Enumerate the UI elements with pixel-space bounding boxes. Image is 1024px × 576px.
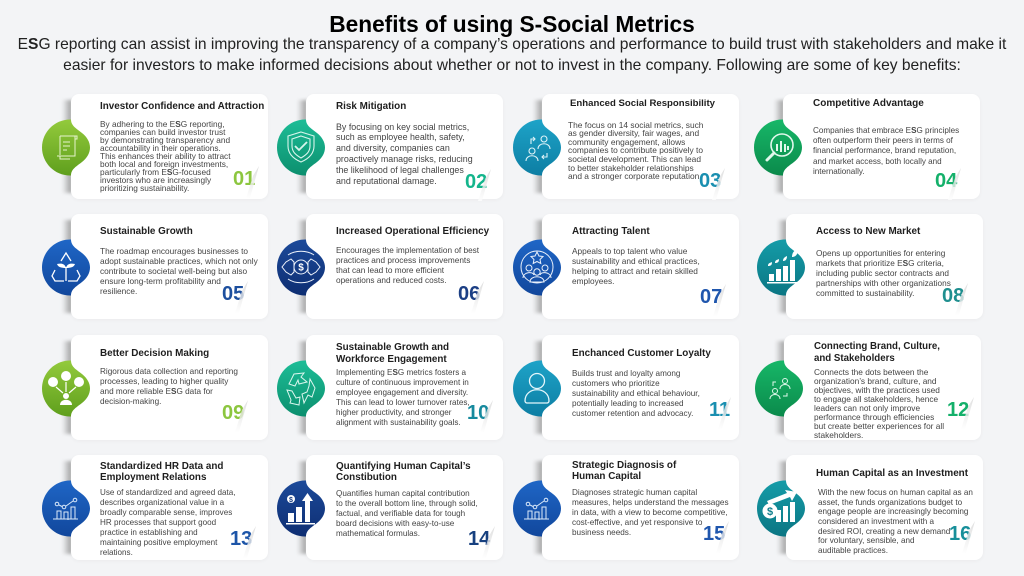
heading: Human Capital — [572, 471, 641, 482]
panel: card 09 — [42, 335, 268, 440]
body text — [572, 488, 729, 537]
icon: solid bars with arrow: $ — [289, 497, 293, 504]
heading: and Stakeholders — [814, 353, 895, 364]
body text: With the new focus on human capital as an — [818, 488, 973, 497]
body text: societal development. This can lead — [568, 154, 701, 164]
body text: as gender diversity, fair wages, and — [568, 128, 699, 138]
body text: markets that prioritize ESG criteria, — [816, 259, 944, 268]
heading: Human Capital as an Investment — [816, 468, 968, 478]
intro text: easier for investors to make informed decisions about whether or not to invest in the company. Following are some of key benefits: — [63, 57, 961, 74]
number: 14 — [468, 528, 490, 550]
body text: stakeholders. — [814, 430, 863, 440]
panel: card 02 — [277, 94, 503, 201]
body text: to engage all stakeholders, hence — [814, 394, 938, 404]
body text: but create better experiences for all — [814, 421, 944, 431]
number: 13 — [230, 528, 252, 550]
intro text — [18, 36, 1006, 74]
body text: and reputational damage. — [336, 176, 437, 186]
body text: committed to sustainability. — [816, 289, 914, 298]
panel: card 08 — [757, 214, 983, 319]
body text: business needs. — [572, 528, 631, 537]
heading: Investor Confidence and Attraction — [100, 101, 264, 112]
heading: Risk Mitigation — [336, 101, 406, 112]
body text: auditable practices. — [818, 546, 888, 555]
body text: companies can build investor trust — [100, 127, 225, 137]
icon: magnifier chart — [754, 120, 802, 176]
number: 12 — [947, 399, 969, 421]
body text: processes, leading to higher quality — [100, 377, 228, 386]
body text: objectives, with the practices used — [814, 385, 940, 395]
icon: person — [513, 360, 561, 416]
heading: Access to New Market — [816, 226, 920, 237]
body text — [572, 246, 700, 286]
body text — [336, 488, 478, 538]
body text: culture of continuous improvement in — [336, 378, 469, 387]
number: 16 — [949, 523, 971, 545]
body text: The focus on 14 social metrics, such — [568, 120, 703, 130]
icon: coin with rising bars — [757, 480, 805, 536]
body text: Opens up opportunities for entering — [816, 249, 945, 258]
body text — [100, 488, 235, 557]
icon: growth bars with leaves — [757, 240, 805, 296]
body text: By adhering to the ESG reporting, — [100, 119, 225, 129]
icon: scroll — [42, 120, 90, 176]
panel: card 15 — [513, 455, 739, 560]
body text — [572, 368, 700, 418]
body text: board decisions with easy-to-use — [336, 519, 454, 528]
heading — [572, 460, 676, 482]
heading: Strategic Diagnosis of — [572, 460, 676, 471]
body text — [100, 246, 258, 296]
number: 10 — [467, 402, 489, 424]
intro text: ESG reporting can assist in improving the transparency of a company’s operations and performance to build trust with stakeholders and make it — [18, 36, 1006, 53]
heading: Attracting Talent — [572, 226, 650, 237]
body text: financial performance, brand reputation, — [813, 146, 956, 155]
icon: recycle arrows — [277, 360, 325, 416]
heading: Constibution — [336, 472, 397, 483]
number: 07 — [700, 286, 722, 308]
heading: Standardized HR Data and — [100, 461, 223, 472]
body text: internationally. — [813, 167, 865, 176]
body text: particularly from ESG-focused — [100, 167, 211, 177]
body text — [336, 246, 479, 285]
body text: sustainability and ethical behaviour, — [572, 389, 700, 398]
body text: broadly comparable sense, improves — [100, 508, 232, 517]
icon: talent group with star — [513, 240, 561, 296]
body text: accountability in their operations. — [100, 143, 221, 153]
body text — [814, 367, 944, 440]
panel: card 11 — [513, 335, 739, 440]
panel: card 12 — [755, 335, 981, 440]
body text: asset, the funds organizations budget to — [818, 498, 962, 507]
body text: and a stronger corporate reputation. — [568, 171, 702, 181]
body text: to better stakeholder relationships — [568, 163, 694, 173]
body text: customers who prioritize — [572, 379, 660, 388]
body text: cost-effective, and yet responsive to — [572, 518, 702, 527]
panel: card 10 — [277, 335, 503, 440]
panel: card 07 — [513, 214, 739, 319]
number: 15 — [703, 523, 725, 545]
body text: partnerships with other organizations — [816, 279, 951, 288]
number: 09 — [222, 402, 244, 424]
heading: Competitive Advantage — [813, 98, 924, 109]
icon: line and bar chart — [513, 480, 561, 536]
body text: employees. — [572, 276, 614, 286]
body text: customer retention and advocacy. — [572, 409, 693, 418]
heading: Enhanced Social Responsibility — [570, 98, 715, 109]
body text: factual, and verifiable data for tough — [336, 509, 465, 518]
body text: often outperform their peers in terms of — [813, 136, 953, 145]
body text: organization’s brand, culture, and — [814, 376, 937, 386]
body text: This can lead to lower turnover rates, — [336, 398, 470, 407]
body text — [100, 119, 231, 193]
heading: Quantifying Human Capital’s — [336, 461, 471, 472]
body text: such as employee health, safety, — [336, 132, 465, 142]
body text: adopt sustainable practices, which not only — [100, 256, 258, 266]
body text: and more reliable ESG data for — [100, 387, 213, 396]
body text: community engagement, allows — [568, 137, 685, 147]
body text — [818, 488, 973, 555]
number: 04 — [935, 170, 957, 192]
body text: and market access, both locally and — [813, 156, 942, 166]
body text: Use of standardized and agreed data, — [100, 488, 235, 496]
body text: operations and reduced costs. — [336, 276, 447, 285]
icon: solid bars with arrow — [277, 480, 325, 536]
body text: Builds trust and loyalty among — [572, 368, 680, 378]
heading: Enchanced Customer Loyalty — [572, 348, 711, 359]
body text: ensure long-term profitability and — [100, 276, 221, 286]
panel: card 14 — [277, 455, 503, 560]
body text: Diagnoses strategic human capital — [572, 488, 697, 496]
panel: card 06 — [277, 214, 503, 319]
body text: the likelihood of legal challenges — [336, 165, 464, 175]
body text: in data, with a view to become competitive, — [572, 508, 728, 517]
heading: Sustainable Growth — [100, 226, 193, 237]
heading — [814, 341, 940, 364]
body text: Implementing ESG metrics fosters a — [336, 368, 466, 376]
body text: performance through efficiencies — [814, 412, 934, 422]
body text: to the overall bottom line, through solid, — [336, 499, 478, 508]
body text: employee engagement and diversity. — [336, 388, 468, 397]
body text — [568, 120, 703, 181]
body text: This enhances their ability to attract — [100, 151, 231, 161]
body text: Companies that embrace ESG principles — [813, 126, 959, 135]
body text: companies to contribute positively to — [568, 145, 703, 155]
body text: practice in establishing and — [100, 528, 198, 537]
number: 02 — [465, 171, 487, 193]
body text: Encourages the implementation of best — [336, 246, 479, 255]
heading: Increased Operational Efficiency — [336, 226, 489, 237]
heading: Connecting Brand, Culture, — [814, 341, 940, 352]
number: 06 — [458, 283, 480, 305]
body text: potentially leading to increased — [572, 399, 684, 408]
body text — [813, 126, 959, 176]
heading: Sustainable Growth and — [336, 342, 449, 353]
body text: practices and process improvements — [336, 256, 470, 265]
body text: describes organizational value in a — [100, 498, 224, 507]
panel: card 16 — [757, 455, 983, 560]
body text: relations. — [100, 548, 133, 557]
body text: mathematical formulas. — [336, 529, 420, 538]
icon: people exchange — [513, 120, 561, 176]
icon: gears and dollar: $ — [298, 262, 304, 274]
body text — [816, 249, 951, 298]
body text: by demonstrating transparency and — [100, 135, 230, 145]
body text: contribute to societal well-being but also — [100, 266, 247, 276]
body text: Quantifies human capital contribution — [336, 488, 470, 498]
body text: Rigorous data collection and reporting — [100, 367, 238, 376]
body text: resilience. — [100, 286, 137, 296]
body text: for voluntary, sensible, and — [818, 536, 914, 545]
number: 01 — [233, 168, 255, 190]
body text: measures, helps understand the messages — [572, 498, 729, 507]
heading: Workforce Engagement — [336, 354, 447, 365]
body text: decision-making. — [100, 397, 161, 406]
body text: leaders can not only improve — [814, 403, 920, 413]
body text: engage people are increasingly becoming — [818, 507, 968, 516]
body text — [336, 122, 473, 186]
body text: The roadmap encourages businesses to — [100, 246, 248, 256]
body text: HR processes that support good — [100, 518, 216, 527]
icon: decision making — [42, 360, 90, 416]
body text: prioritizing sustainability. — [100, 183, 189, 193]
body text: maintaining positive employment — [100, 538, 217, 547]
heading — [336, 342, 449, 365]
heading: Employment Relations — [100, 472, 206, 483]
body text: higher productivity, and stronger — [336, 408, 451, 417]
body text: Connects the dots between the — [814, 367, 928, 377]
number: 08 — [942, 285, 964, 307]
icon: coin with rising bars: $ — [767, 506, 773, 518]
body text: both local and foreign investments, — [100, 159, 228, 169]
body text: considered an investment with a — [818, 517, 934, 526]
number: 05 — [222, 283, 244, 305]
icon: gears and dollar — [277, 240, 325, 296]
number: 03 — [699, 170, 721, 192]
icon: line and bar chart — [42, 480, 90, 536]
body text — [100, 367, 238, 406]
heading — [336, 461, 471, 483]
body text: proactively manage risks, reducing — [336, 154, 473, 164]
panel: card 01 — [42, 94, 268, 199]
body text: desired ROI, creating a new demand — [818, 527, 950, 536]
body text: and diversity, companies can — [336, 143, 450, 153]
panel: card 04 — [754, 94, 980, 199]
panel: card 13 — [42, 455, 268, 560]
heading: Better Decision Making — [100, 348, 209, 359]
body text: sustainability and ethical practices, — [572, 256, 700, 266]
panel: card 05 — [42, 214, 268, 319]
body text: that can lead to more efficient — [336, 266, 444, 275]
icon: recycle plant — [42, 240, 90, 296]
body text: investors who are increasingly — [100, 175, 211, 185]
icon: people exchange small — [755, 360, 803, 416]
body text — [336, 368, 470, 427]
heading — [100, 461, 223, 483]
body text: including public sector contracts and — [816, 269, 949, 278]
body text: alignment with sustainability goals. — [336, 418, 461, 427]
icon: shield — [277, 120, 325, 176]
body text: helping to attract and retain skilled — [572, 266, 698, 276]
panel: card 03 — [513, 94, 739, 199]
number: 11 — [709, 399, 730, 421]
body text: Appeals to top talent who value — [572, 246, 687, 256]
title: Benefits of using S-Social Metrics — [329, 10, 695, 36]
body text: By focusing on key social metrics, — [336, 122, 469, 132]
